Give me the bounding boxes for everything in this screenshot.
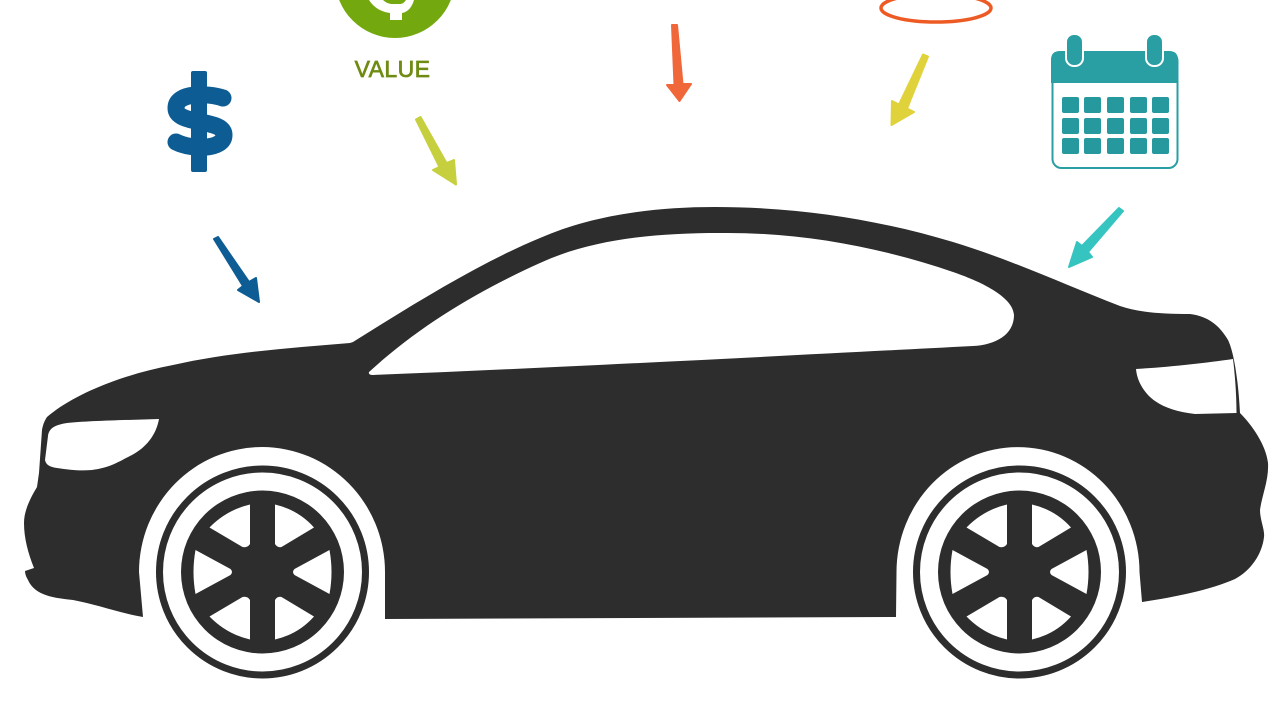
front headlight xyxy=(45,419,159,470)
car body silhouette xyxy=(24,207,1268,619)
calendar header xyxy=(1051,51,1178,83)
dollar icon xyxy=(176,71,224,172)
value label: VALUE xyxy=(355,56,430,82)
date cells xyxy=(1062,97,1169,154)
arrow: orange xyxy=(667,25,691,101)
binder rings xyxy=(1066,34,1163,66)
arrow: teal xyxy=(1069,208,1123,267)
side window xyxy=(369,233,1014,375)
arrow: yellow xyxy=(892,54,928,125)
front-right wheel xyxy=(916,469,1122,675)
value icon: green circle with dollar, cropped at top xyxy=(335,0,455,38)
calendar page xyxy=(1052,52,1178,168)
rear-left wheel xyxy=(160,469,366,675)
orange ellipse icon, cropped at top xyxy=(881,0,991,22)
calendar icon xyxy=(1051,34,1178,168)
arrow: blue xyxy=(214,237,259,302)
rear tail light xyxy=(1136,359,1236,414)
arrow: lime xyxy=(416,117,456,184)
car xyxy=(24,207,1268,675)
